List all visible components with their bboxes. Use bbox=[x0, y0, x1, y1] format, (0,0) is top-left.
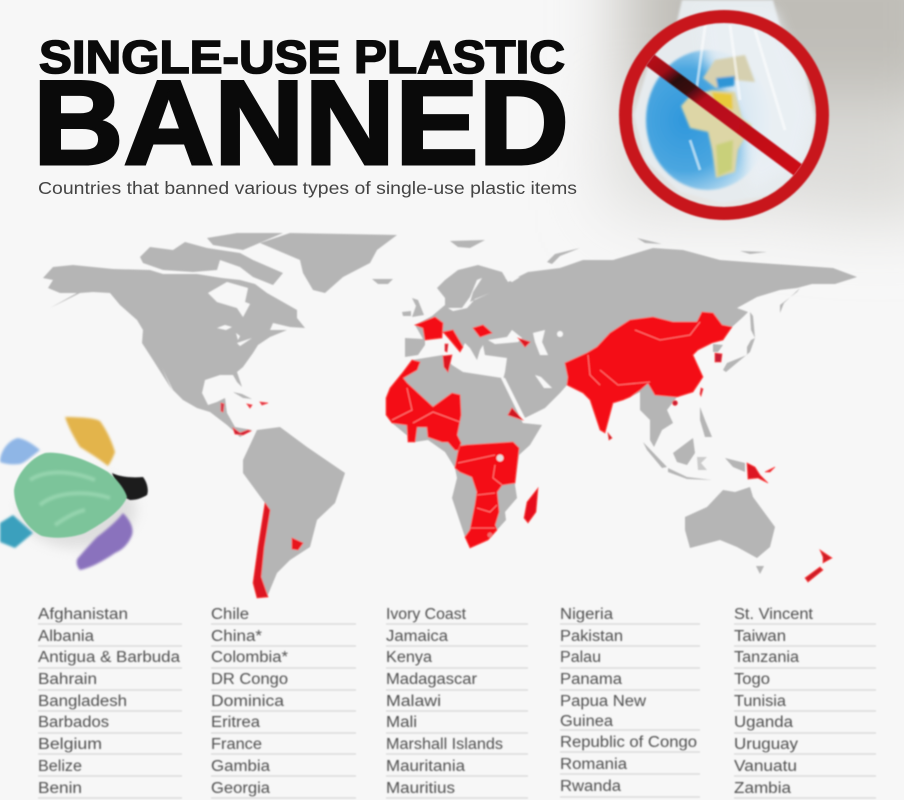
Tasmania bbox=[756, 566, 764, 574]
column 5: Uruguay bbox=[734, 736, 798, 753]
globe continents bbox=[681, 55, 755, 178]
icon: plastic bag turtle bbox=[0, 417, 148, 570]
Ellesmere Island bbox=[207, 233, 283, 250]
column 3: Jamaica bbox=[386, 628, 448, 645]
title bbox=[33, 31, 569, 190]
column 4: Papua New bbox=[560, 693, 647, 710]
column 4: Nigeria bbox=[560, 606, 613, 623]
Caribbean islands bbox=[247, 402, 268, 408]
yellow flipper bbox=[65, 417, 115, 466]
Arctic Canada islands bbox=[140, 242, 283, 285]
column 2: Colombia* bbox=[211, 649, 288, 666]
Australia bbox=[685, 487, 775, 558]
shell folds bbox=[30, 472, 110, 525]
column 3: Ivory Coast bbox=[386, 606, 467, 623]
Uruguay bbox=[292, 538, 303, 550]
teal flipper bbox=[0, 515, 33, 548]
column 1: Belize bbox=[38, 758, 82, 775]
column 2 bbox=[211, 606, 356, 798]
Baltic Sea bbox=[448, 278, 490, 311]
North Korea bbox=[713, 344, 723, 352]
column 1: Albania bbox=[38, 628, 94, 645]
column 3: Mauritania bbox=[386, 758, 465, 775]
column 1: Belgium bbox=[38, 736, 102, 753]
Japan bbox=[723, 338, 755, 372]
South Korea bbox=[715, 353, 722, 362]
Cuba bbox=[233, 392, 252, 399]
column 4: Guinea bbox=[560, 713, 613, 730]
Italy bbox=[443, 330, 463, 352]
prohibition slash bbox=[650, 60, 798, 170]
Taiwan bbox=[700, 388, 703, 396]
column 5: Zambia bbox=[734, 780, 791, 797]
column 5: St. Vincent bbox=[734, 606, 814, 623]
column 5 bbox=[734, 606, 876, 798]
Belize bbox=[221, 403, 224, 412]
column 5: Vanuatu bbox=[734, 758, 797, 775]
White Sea bbox=[505, 277, 520, 282]
column 5: Uganda bbox=[734, 714, 793, 731]
column 4: Pakistan bbox=[560, 628, 623, 645]
South and East Asia bbox=[565, 312, 732, 433]
map: red banned countries bbox=[221, 312, 832, 598]
column 2: Gambia bbox=[211, 758, 270, 775]
column 5: Togo bbox=[734, 671, 770, 688]
column 4: Romania bbox=[560, 756, 627, 773]
column 2: France bbox=[211, 736, 262, 753]
New Zealand bbox=[805, 550, 832, 582]
column 1: Antigua & Barbuda bbox=[38, 649, 180, 666]
column 4: Palau bbox=[560, 649, 601, 666]
column 1 bbox=[38, 606, 182, 798]
column 2: Chile bbox=[211, 606, 249, 623]
purple flipper bbox=[77, 513, 133, 570]
West Africa bbox=[386, 360, 461, 450]
Madagascar bbox=[524, 488, 538, 523]
column 4 bbox=[560, 606, 700, 797]
column 2: Eritrea bbox=[211, 714, 260, 731]
prohibition ring bbox=[626, 16, 822, 214]
Greenland bbox=[260, 233, 397, 293]
Lake Victoria bbox=[496, 454, 504, 462]
Sulawesi bbox=[697, 457, 707, 470]
world map bbox=[43, 233, 857, 598]
Central and Southern Africa bbox=[455, 442, 519, 548]
Black Sea bbox=[488, 330, 522, 344]
column 1: Bangladesh bbox=[38, 693, 127, 710]
Iceland bbox=[372, 279, 393, 284]
globe bbox=[646, 50, 770, 190]
column 2: Dominica bbox=[211, 693, 284, 710]
column 4: Rwanda bbox=[560, 778, 621, 795]
Great Lakes bbox=[217, 325, 252, 346]
Romania bbox=[473, 325, 492, 337]
column 3: Kenya bbox=[386, 649, 432, 666]
title line: single-use plastic: SINGLE-USE PLASTIC bbox=[39, 31, 565, 83]
black head bbox=[112, 473, 148, 500]
Red Sea and Gulf of Aden bbox=[501, 378, 545, 423]
column 3: Mauritius bbox=[386, 780, 455, 797]
background shadow behind banned globe bbox=[610, 0, 904, 220]
column 2: Georgia bbox=[211, 780, 270, 797]
subtitle: Countries that banned various types of single-use plastic items bbox=[38, 178, 577, 198]
map: country borders bbox=[392, 322, 700, 528]
Hudson Bay bbox=[208, 282, 250, 317]
column 2: DR Congo bbox=[211, 671, 288, 688]
Lesotho bbox=[488, 532, 492, 538]
bag folds bbox=[690, 20, 785, 170]
Africa bbox=[386, 355, 542, 548]
column 4: Republic of Congo bbox=[560, 734, 697, 751]
column 3: Madagascar bbox=[386, 671, 477, 688]
column 1: Barbados bbox=[38, 714, 109, 731]
Eurasia bbox=[405, 248, 857, 447]
turtle shadow bbox=[20, 472, 136, 548]
column 1: Benin bbox=[38, 780, 82, 797]
map: seas and lakes over land bbox=[208, 277, 563, 423]
column 3: Marshall Islands bbox=[386, 736, 503, 753]
bag haze over globe bbox=[700, 10, 812, 190]
Sri Lanka bbox=[608, 433, 612, 440]
column 5: Tunisia bbox=[734, 693, 786, 710]
Arctic Russia islands bbox=[450, 238, 767, 264]
column 5: Taiwan bbox=[734, 628, 786, 645]
column 5: Tanzania bbox=[734, 649, 799, 666]
Sardinia bbox=[445, 344, 448, 352]
map: gray land bbox=[43, 233, 857, 597]
column 3 bbox=[386, 606, 528, 798]
Tunisia bbox=[443, 355, 452, 372]
country list bbox=[38, 606, 876, 798]
North America bbox=[43, 265, 305, 437]
Kamchatka bbox=[780, 288, 800, 313]
United Kingdom and Ireland bbox=[402, 298, 424, 317]
plastic bag bbox=[634, 0, 815, 203]
Hainan bbox=[672, 400, 678, 406]
Central America bbox=[233, 428, 251, 435]
green shell bbox=[14, 453, 127, 538]
column 1: Bahrain bbox=[38, 671, 97, 688]
Papua New Guinea bbox=[747, 463, 775, 483]
Caspian Sea bbox=[533, 330, 548, 355]
France bbox=[415, 317, 443, 340]
icon: globe in plastic bag with prohibition sign bbox=[626, 0, 822, 214]
Chile bbox=[253, 503, 270, 598]
Aral Sea bbox=[557, 331, 563, 337]
column 3: Mali bbox=[386, 714, 417, 731]
column 2: China* bbox=[211, 628, 262, 645]
Eritrea bbox=[508, 408, 523, 420]
title line: banned: BANNED bbox=[33, 56, 569, 190]
Persian Gulf bbox=[535, 375, 552, 388]
Southeast Asia islands bbox=[643, 407, 745, 480]
column 1: Afghanistan bbox=[38, 606, 128, 623]
South America bbox=[243, 427, 345, 597]
Georgia bbox=[518, 338, 530, 347]
column 3: Malawi bbox=[386, 693, 441, 710]
Sakhalin bbox=[750, 312, 755, 338]
blue flipper bbox=[0, 438, 40, 464]
column 4: Panama bbox=[560, 671, 622, 688]
